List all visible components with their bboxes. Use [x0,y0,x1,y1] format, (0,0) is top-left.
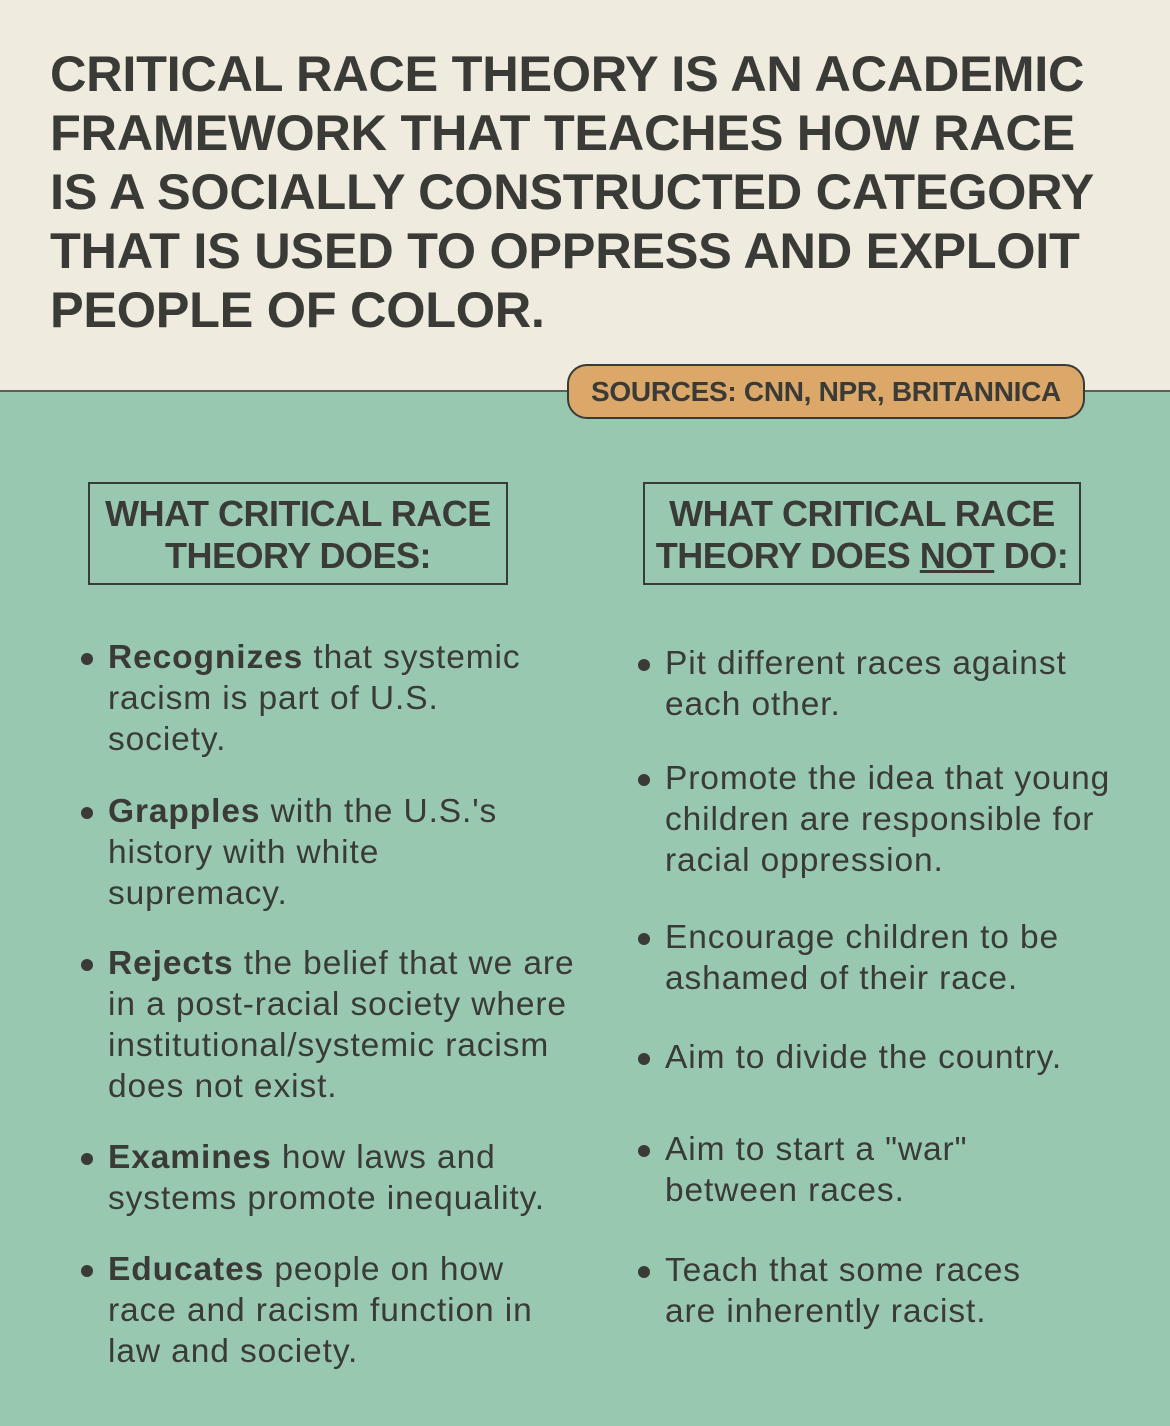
item 5 [88,1249,588,1372]
title: CRITICAL RACE THEORY IS AN ACADEMIC [50,45,1084,102]
item 3: ashamed of their race. [665,960,1018,997]
item 3: does not exist. [108,1068,338,1105]
item 2 [88,791,588,943]
item 2: supremacy. [108,875,288,912]
item 3 [645,917,1145,1037]
item 6 [645,1250,1145,1332]
item 5: between races. [665,1172,905,1209]
heading: does not [643,482,1081,585]
item 2: children are responsible for [665,801,1094,838]
title [50,45,1094,338]
list: does not [638,645,1110,1330]
item 3: Rejects the belief that we are [108,945,574,982]
item 6: Teach that some races [665,1252,1021,1289]
heading: does: WHAT CRITICAL RACE [105,493,491,534]
item 4: Examines how laws and [108,1139,496,1176]
item 3 [88,943,588,1137]
item 2: racial oppression. [665,842,944,879]
list: does [81,639,574,1370]
heading: does not: THEORY DOES NOT DO: [656,535,1068,576]
item 1: Recognizes that systemic [108,639,521,676]
item 1: racism is part of U.S. [108,680,439,717]
item 2 [645,758,1145,917]
title: THAT IS USED TO OPPRESS AND EXPLOIT [50,222,1080,279]
item 5: Aim to start a "war" [665,1131,967,1168]
item 6: are inherently racist. [665,1293,986,1330]
title: PEOPLE OF COLOR. [50,281,545,338]
title: IS A SOCIALLY CONSTRUCTED CATEGORY [50,163,1094,220]
item 3: institutional/systemic racism [108,1027,549,1064]
item 3: Encourage children to be [665,919,1059,956]
item 3: in a post-racial society where [108,986,567,1023]
item 1 [88,637,588,791]
heading: does: THEORY DOES: [165,535,431,576]
item 4: systems promote inequality. [108,1180,545,1217]
sources pill: SOURCES: CNN, NPR, BRITANNICA [591,376,1061,407]
item 1 [645,643,1145,758]
item 5: Educates people on how [108,1251,504,1288]
item 5: race and racism function in [108,1292,533,1329]
header band [0,0,1170,392]
item 5 [645,1129,1145,1250]
item 4 [88,1137,588,1249]
item 4: Aim to divide the country. [665,1039,1062,1076]
item 5: law and society. [108,1333,358,1370]
heading: does not: WHAT CRITICAL RACE [669,493,1055,534]
sources pill [567,364,1085,419]
item 1: Pit different races against [665,645,1067,682]
item 2: Promote the idea that young [665,760,1110,797]
item 1: each other. [665,686,841,723]
title: FRAMEWORK THAT TEACHES HOW RACE [50,104,1075,161]
item 1: society. [108,721,226,758]
item 2: history with white [108,834,379,871]
item 2: Grapples with the U.S.'s [108,793,497,830]
heading: does [88,482,508,585]
